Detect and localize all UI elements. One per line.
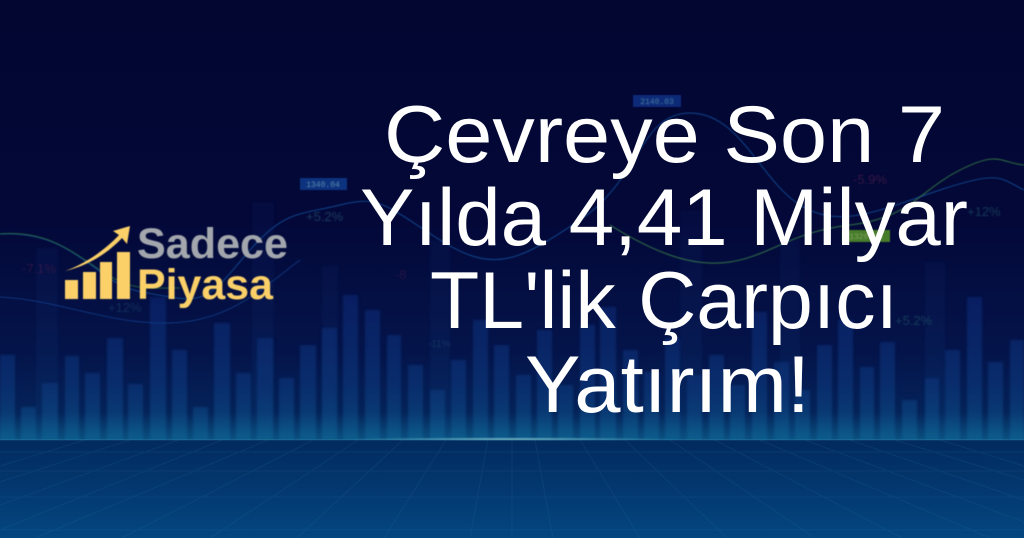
faint percentage labels: +5.2% bbox=[895, 313, 933, 328]
logo wordmark: Sadece: Sadece bbox=[137, 220, 288, 268]
title bbox=[360, 90, 968, 430]
title: Çevreye Son 7 bbox=[384, 90, 945, 180]
faint percentage labels: -11% bbox=[428, 339, 451, 350]
chart tag: green bbox=[842, 230, 890, 242]
bar chart: background bars bbox=[0, 295, 1024, 440]
title: TL'lik Çarpıcı bbox=[430, 256, 898, 346]
faint percentage labels: -8 bbox=[395, 267, 407, 282]
faint percentage labels: -5.9% bbox=[853, 172, 887, 187]
faint percentage labels: -7.1% bbox=[22, 261, 56, 276]
chart tag: 1340.04: 1340.04 bbox=[306, 181, 340, 190]
background: faded tall bars bbox=[36, 202, 945, 440]
faint percentage labels: +12% bbox=[108, 300, 142, 315]
chart tag: 1340.04 bbox=[300, 178, 347, 190]
faint percentage labels bbox=[22, 172, 1001, 350]
faint percentage labels: +5.2% bbox=[306, 209, 344, 224]
chart trend lines bbox=[0, 113, 1024, 323]
chart tag: 2140.03: 2140.03 bbox=[640, 98, 674, 107]
title: Yılda 4,41 Milyar bbox=[360, 173, 968, 263]
title: Yatırım! bbox=[525, 340, 810, 430]
floor with perspective grid bbox=[0, 437, 1024, 538]
logo wordmark: Piyasa: Piyasa bbox=[137, 261, 274, 309]
chart tag: green: 1320.06 bbox=[849, 233, 883, 242]
horizon glow bbox=[0, 412, 1024, 440]
faint percentage labels: +12% bbox=[967, 204, 1001, 219]
chart tag: 2140.03 bbox=[633, 95, 681, 107]
logo: Sadece Piyasa bbox=[65, 220, 288, 309]
icon: rising bars with arrow bbox=[65, 226, 130, 299]
